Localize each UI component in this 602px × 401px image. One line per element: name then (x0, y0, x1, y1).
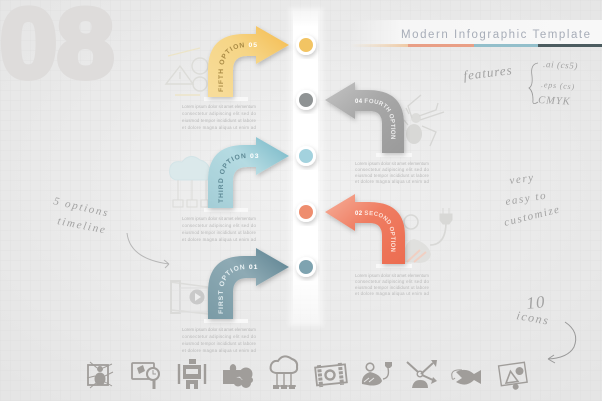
label: fifth option: FIFTH OPTION 05 (218, 42, 257, 92)
text block: option 4: eiusmod tempor incididunt ut labore (355, 173, 429, 178)
handwritten note: 10 icons: 10 (525, 292, 546, 313)
handwritten note: very easy to customise: customize (503, 203, 562, 229)
handwritten note: 5 options timeline: timeline (56, 215, 108, 236)
handwritten note: features: CMYK (538, 95, 571, 108)
handwritten note: features: features (463, 62, 513, 83)
icon: robot (179, 359, 205, 389)
label: first option: FIRST OPTION 01 (218, 264, 258, 314)
text block: option 1: eiusmod tempor incididunt ut labore (182, 341, 256, 346)
text block: option 5: Lorem ipsum dolor sit amet elementum (182, 104, 256, 109)
arrow: to icons (548, 322, 576, 363)
ghost icon: cloud network (170, 156, 210, 207)
text block: option 2: consectetur adipiscing elit sed do (355, 279, 429, 284)
node: option 3 (296, 146, 316, 166)
handwritten note: very easy to customise: very (509, 172, 535, 187)
text block: option 3 (182, 216, 256, 242)
text block: option 3: Lorem ipsum dolor sit amet elementum (182, 216, 256, 221)
option 1 arrow (204, 248, 290, 323)
icon: puzzle pieces (223, 364, 253, 388)
text block: option 2: eiusmod tempor incididunt ut labore (355, 285, 429, 290)
text block: option 3: et dolore magna aliqua ut enim ad (182, 237, 256, 242)
ghost icons: warning and gears (166, 48, 208, 95)
ghost icon: mouse and plug (404, 208, 452, 263)
label: third option: THIRD OPTION 03 (218, 153, 258, 203)
handwritten note: 5 options timeline: 5 options (52, 195, 110, 220)
handwritten note: 10 icons (515, 292, 551, 328)
icon: mouse and plug (362, 362, 392, 386)
text block: option 1: et dolore magna aliqua ut enim ad (182, 348, 256, 353)
node: option 5 (296, 35, 316, 55)
icon: angler fish (452, 370, 481, 385)
text block: option 5: eiusmod tempor incididunt ut labore (182, 118, 256, 123)
text block: option 5: et dolore magna aliqua ut enim ad (182, 125, 256, 130)
text block: option 1: consectetur adipiscing elit sed do (182, 334, 256, 339)
title banner: Modern Infographic Template (401, 29, 592, 41)
node: option 1 (296, 257, 316, 277)
icon: magnifier and monitor (132, 363, 159, 389)
handwritten note: features: .ai (cs5) (543, 59, 578, 71)
text block: option 5: consectetur adipiscing elit sed do (182, 111, 256, 116)
icon: film strip (315, 362, 347, 387)
text block: option 3: eiusmod tempor incididunt ut labore (182, 230, 256, 235)
handwritten note: very easy to customise: easy to (505, 190, 548, 208)
option 3 arrow (204, 137, 290, 212)
handwritten note: 10 icons: icons (515, 308, 551, 328)
centre timeline band (289, 8, 323, 326)
icon: cloud network (271, 356, 297, 389)
handwritten note: features (463, 59, 578, 108)
ghost icon: film (170, 281, 208, 314)
text block: option 4 (355, 161, 429, 184)
icon: crossed arrows (407, 360, 437, 388)
text block: option 4: Lorem ipsum dolor sit amet elementum (355, 161, 429, 166)
text block: option 2: et dolore magna aliqua ut enim ad (355, 291, 429, 296)
handwritten note: features: .eps (cs) (541, 80, 575, 91)
icon row (87, 356, 528, 392)
option nodes (296, 35, 316, 277)
text block: option 2: Lorem ipsum dolor sit amet elementum (355, 273, 429, 278)
arrow: to timeline (127, 233, 169, 268)
text block: option 1: Lorem ipsum dolor sit amet elementum (182, 327, 256, 332)
node: option 4 (296, 90, 316, 110)
icon: spider (87, 362, 113, 388)
title banner (350, 20, 602, 47)
handwritten note: very easy to customise (503, 172, 562, 229)
text block: option 5 (182, 104, 256, 130)
ghost icon: spider (404, 95, 444, 146)
option 5 arrow (204, 26, 290, 101)
text block: option 4: consectetur adipiscing elit sed do (355, 167, 429, 172)
node: option 2 (296, 202, 316, 222)
text block: option 4: et dolore magna aliqua ut enim ad (355, 179, 429, 184)
option 4 arrow (325, 82, 412, 157)
icon: cards with warning (499, 362, 528, 392)
text block: option 3: consectetur adipiscing elit sed do (182, 223, 256, 228)
text block: option 1 (182, 327, 256, 353)
handwritten note: 5 options timeline (52, 195, 110, 236)
text block: option 2 (355, 273, 429, 296)
option 2 arrow (325, 194, 412, 268)
label: fourth option: 04 FOURTH OPTION (355, 98, 396, 139)
label: second option: 02 SECOND OPTION (355, 210, 396, 252)
